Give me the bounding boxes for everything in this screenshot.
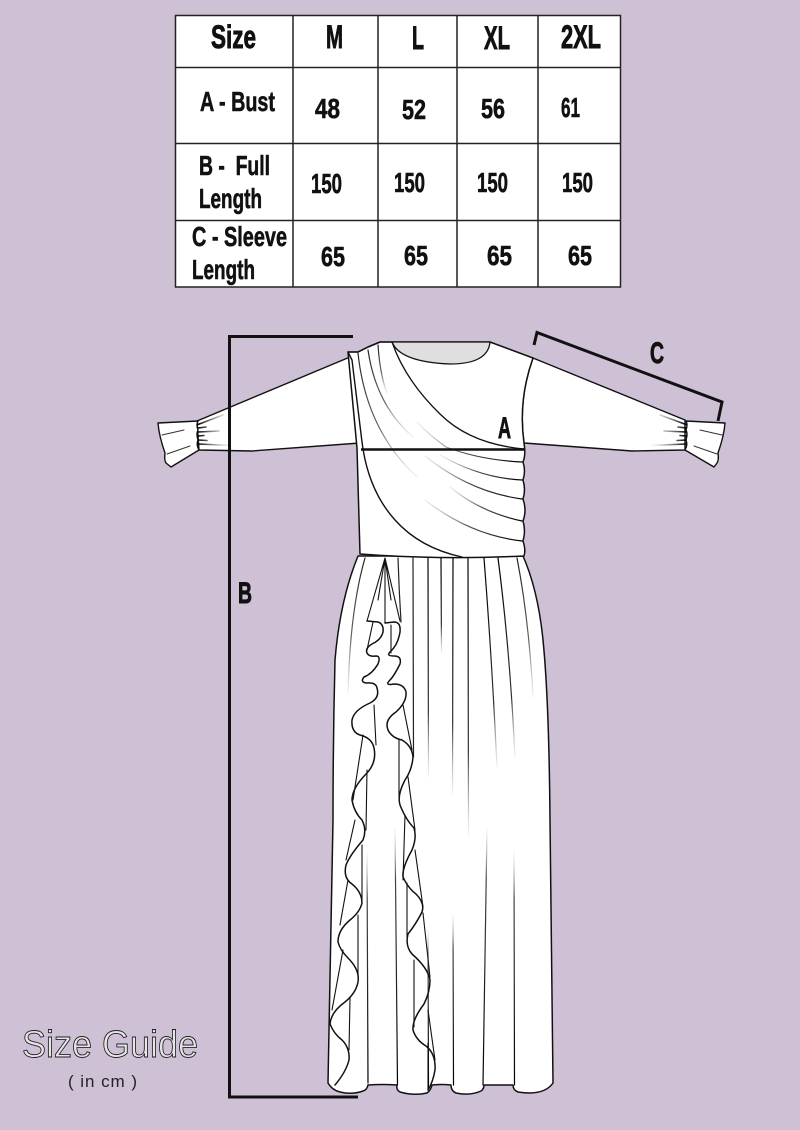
right cuff [685,421,725,467]
left cuff [158,421,199,467]
table row: sleeve length: 65 [487,240,512,271]
ruffle inner lines [332,622,435,1090]
right ruffle edge [385,622,435,1090]
table grid [175,15,621,287]
table row: sleeve length: 65 [404,240,428,271]
right sleeve [522,358,725,467]
dress technical drawing [158,342,725,1094]
left sleeve [158,357,360,467]
front ruffle [330,558,435,1090]
measure A: bust line: A [498,412,511,445]
measure C: sleeve length bracket: C [650,337,664,370]
measure C: sleeve length bracket [534,332,722,421]
bodice [348,342,533,558]
table row: bust: A - Bust [200,86,275,117]
table row: full length [199,150,593,214]
table row: full length: 150 [477,167,508,198]
drape folds [358,345,522,541]
table header row: XL [484,20,510,56]
skirt pleats [348,558,533,1088]
table row: bust: 56 [481,93,505,124]
neckline [392,342,490,364]
table row: bust [200,86,580,125]
table header row: M [326,19,343,55]
table row: bust: 52 [402,94,426,125]
skirt [328,556,553,1094]
measure B: full length bracket [230,336,358,1097]
measure B: full length bracket: B [238,577,252,610]
table row: sleeve length: 65 [321,241,345,272]
table row: full length: Length [199,183,262,214]
table row: full length: 150 [311,168,342,199]
table header row [211,19,601,56]
title: size guide: Size Guide [22,1024,198,1066]
left ruffle edge [330,621,383,1085]
unit note: ( in cm ) [68,1072,137,1091]
table row: sleeve length: 65 [568,240,592,271]
table row: full length: B - Full [199,150,270,181]
table row: sleeve length [192,221,592,285]
table row: full length: 150 [394,167,425,198]
size table [175,15,621,287]
table row: bust: 48 [315,93,340,124]
table row: full length: 150 [562,167,593,198]
shoulder drape outlines [348,342,524,449]
ruffle apex folds [367,558,400,623]
table header row: L [412,20,424,56]
table row: sleeve length: C - Sleeve [192,221,287,252]
table row: bust: 61 [561,92,580,123]
table row: sleeve length: Length [192,254,255,285]
table header row: Size [211,19,256,55]
title: size guide [22,1024,198,1091]
table header row: 2XL [561,19,601,55]
